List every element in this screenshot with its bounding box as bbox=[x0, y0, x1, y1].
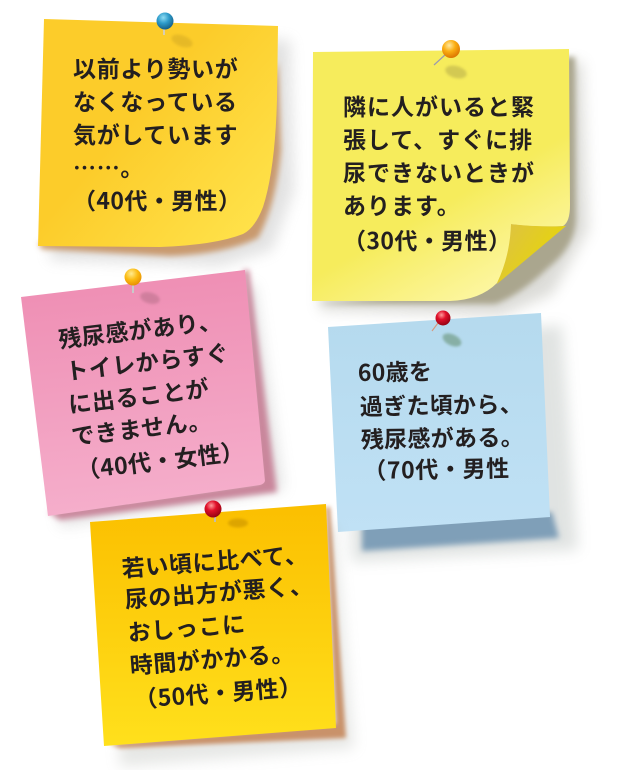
text: note 3: できません。 bbox=[69, 402, 213, 452]
text: note 1: なくなっている bbox=[73, 83, 238, 117]
pin: red on blue note bbox=[432, 310, 463, 349]
text: note 2: 張して、すぐに排 bbox=[343, 121, 533, 155]
text: note 1: 気がしています bbox=[73, 116, 238, 150]
text: note 4 bbox=[358, 353, 524, 486]
text: note 3: トイレからすぐ bbox=[63, 334, 231, 387]
pin: red on orange note bbox=[204, 500, 248, 528]
text: note 4: （70代・男性 bbox=[363, 449, 510, 486]
text: note 4: 過ぎた頃から、 bbox=[360, 385, 523, 422]
pin: yellow-orange bbox=[124, 268, 161, 306]
curled corner flap bbox=[497, 224, 566, 284]
text: note 3: （40代・女性） bbox=[75, 432, 246, 486]
text: note 2: 隣に人がいると緊 bbox=[343, 88, 535, 122]
text: note 1: 以前より勢いが bbox=[73, 50, 238, 84]
note: 40s male, orange bbox=[38, 19, 294, 266]
text: note 2 bbox=[343, 88, 535, 256]
text: note 4: 60歳を bbox=[358, 353, 432, 388]
text: note 3: 残尿感があり、 bbox=[56, 302, 223, 355]
text: note 5: （50代・男性） bbox=[133, 668, 303, 715]
text: note 5: 尿の出方が悪く、 bbox=[123, 566, 314, 615]
text: note 1: ……。 bbox=[73, 149, 144, 183]
note: 70s male, blue bbox=[328, 313, 578, 562]
text: note 1: （40代・男性） bbox=[73, 182, 241, 216]
text: note 5: おしっこに bbox=[126, 605, 247, 648]
text: note 1 bbox=[73, 50, 241, 216]
pin: blue bbox=[156, 12, 194, 50]
text: note 5: 時間がかかる。 bbox=[128, 634, 296, 681]
text: note 5 bbox=[120, 535, 314, 715]
text: note 5: 若い頃に比べて、 bbox=[120, 535, 309, 584]
text: note 2: あります。 bbox=[343, 187, 461, 221]
text: note 4: 残尿感がある。 bbox=[361, 418, 524, 455]
note: 50s male, deep yellow bbox=[90, 504, 354, 767]
text: note 2: 尿できないときが bbox=[343, 154, 535, 188]
note: 30s male, yellow with curled corner bbox=[312, 49, 588, 316]
note: 40s female, pink bbox=[21, 270, 284, 527]
text: note 3: に出ることが bbox=[66, 369, 211, 420]
text: note 3 bbox=[56, 302, 246, 486]
text: note 2: （30代・男性） bbox=[343, 222, 511, 256]
pin: orange bbox=[434, 40, 468, 81]
